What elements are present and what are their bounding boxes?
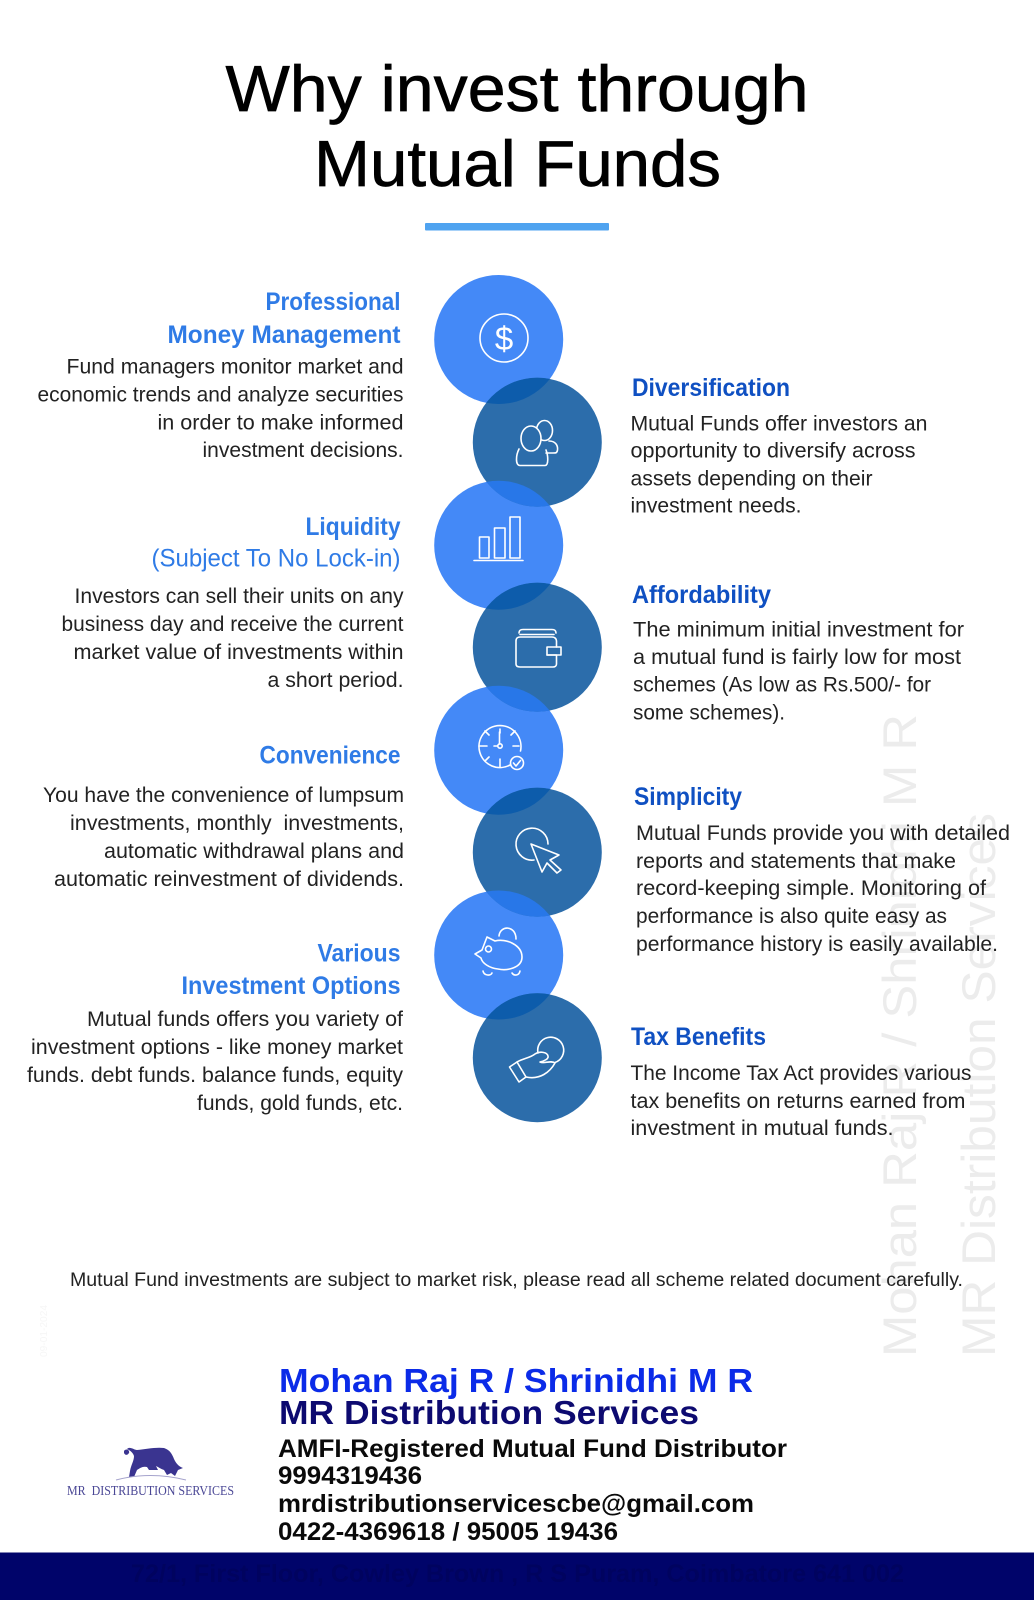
body: some schemes). (633, 700, 785, 724)
watermark: date: 09-01-2024 (39, 1305, 50, 1357)
body: Fund managers monitor market and (66, 354, 404, 378)
body: automatic withdrawal plans and (104, 839, 404, 863)
right block: affordability (632, 581, 964, 724)
icon: hand holding coin (510, 1037, 564, 1082)
details: 0422-4369618 / 95005 19436 (278, 1518, 618, 1546)
heading: Tax Benefits (631, 1023, 766, 1051)
body (633, 618, 964, 724)
body: schemes (As low as Rs.500/- for (633, 672, 931, 696)
heading: Investment Options (182, 972, 400, 1000)
body: Mutual Funds offer investors an (630, 412, 928, 436)
body (43, 783, 404, 891)
body: automatic reinvestment of dividends. (54, 867, 404, 891)
title: Mutual Funds (314, 127, 721, 200)
body: in order to make informed (158, 410, 404, 434)
icon: people (516, 420, 558, 466)
body (38, 354, 404, 462)
heading: Various (318, 940, 400, 968)
body: Investors can sell their units on any (74, 584, 404, 608)
heading: Convenience (260, 742, 401, 770)
left block: liquidity (62, 513, 404, 692)
circle 8 (473, 993, 602, 1122)
body: The minimum initial investment for (633, 618, 964, 642)
icon: wallet (516, 630, 561, 667)
body (27, 1007, 403, 1115)
adviser names: Mohan Raj R / Shrinidhi M R (279, 1362, 753, 1399)
body: Mutual funds offers you variety of (87, 1007, 403, 1031)
icon: clock with check (479, 726, 524, 770)
body: a short period. (268, 668, 404, 692)
details: 9994319436 (278, 1462, 422, 1490)
footer band (0, 1552, 1034, 1600)
body: funds. debt funds. balance funds, equity (27, 1063, 403, 1087)
body (630, 1061, 972, 1140)
body: opportunity to diversify across (630, 438, 916, 462)
circle 2 (473, 378, 602, 507)
icon: cursor (516, 828, 561, 873)
heading: Diversification (632, 374, 790, 402)
circle 3 (434, 481, 563, 610)
left block: various investment options (27, 940, 403, 1115)
heading (182, 940, 400, 1000)
details: mrdistributionservicescbe@gmail.com (278, 1490, 754, 1518)
body: investment options - like money market (31, 1035, 403, 1059)
circle 4 (473, 583, 602, 712)
body: Mutual Funds provide you with detailed (636, 821, 1010, 845)
watermark: adviser names: Mohan Raj R / Shrinidhi M R (873, 714, 926, 1357)
body: The Income Tax Act provides various (630, 1061, 972, 1085)
title: Why invest through (226, 52, 808, 125)
body: a mutual fund is fairly low for most (633, 645, 961, 669)
title (226, 52, 808, 200)
icon: bar chart (474, 517, 523, 560)
logo (67, 1448, 234, 1498)
icon: dollar coin (480, 314, 528, 362)
right block: tax benefits (630, 1023, 972, 1140)
details: AMFI-Registered Mutual Fund Distributor (278, 1435, 787, 1463)
body (630, 412, 928, 518)
body: assets depending on their (630, 466, 872, 490)
circle chain (434, 275, 602, 1122)
body: reports and statements that make (636, 849, 956, 873)
body: business day and receive the current (62, 612, 404, 636)
heading: Simplicity (634, 783, 742, 811)
overlaps (486, 378, 550, 1020)
right block: diversification (630, 374, 928, 518)
circle 1 (434, 275, 563, 404)
body: funds, gold funds, etc. (197, 1091, 403, 1115)
body: record-keeping simple. Monitoring of (636, 876, 986, 900)
title underline (425, 223, 609, 230)
body: investment needs. (630, 494, 802, 518)
left block: professional money management (38, 288, 404, 462)
body (636, 821, 1010, 956)
right block: simplicity (634, 783, 1010, 956)
circle 6 (473, 788, 602, 917)
body: You have the convenience of lumpsum (43, 783, 404, 807)
body: investment in mutual funds. (630, 1116, 894, 1140)
heading: (Subject To No Lock-in) (152, 544, 400, 572)
heading: Money Management (168, 321, 401, 349)
body: investment decisions. (202, 438, 404, 462)
left block: convenience (43, 742, 404, 891)
disclaimer: Mutual Fund investments are subject to market risk, please read all scheme related document carefully. (70, 1269, 963, 1291)
arc (116, 1476, 186, 1480)
heading (152, 513, 401, 572)
heading (168, 288, 401, 349)
heading: Liquidity (306, 513, 401, 541)
company: MR Distribution Services (279, 1394, 699, 1431)
address: 72/1, First Floor, Cowley Brown , R S Puram, Coimbatore 641 002 (131, 1560, 904, 1588)
body: investments, monthly investments, (70, 811, 404, 835)
body (62, 584, 404, 692)
icon: bull (124, 1448, 183, 1477)
icon: piggy bank (475, 928, 522, 975)
body: performance history is easily available. (636, 932, 998, 956)
heading: Affordability (632, 581, 771, 609)
heading: Professional (266, 288, 400, 316)
contact block (278, 1362, 787, 1546)
watermark: adviser names: MR Distribution Services (952, 813, 1005, 1357)
body: market value of investments within (74, 640, 404, 664)
circle 7 (434, 890, 563, 1020)
body: performance is also quite easy as (636, 904, 947, 928)
body: economic trends and analyze securities (38, 382, 404, 406)
icon: dollar coin: $ (495, 320, 513, 357)
watermark: adviser names (873, 714, 1005, 1357)
body: tax benefits on returns earned from (630, 1089, 966, 1113)
details (278, 1435, 787, 1546)
circle 5 (434, 686, 563, 815)
logo text: MR DISTRIBUTION SERVICES (67, 1483, 234, 1498)
